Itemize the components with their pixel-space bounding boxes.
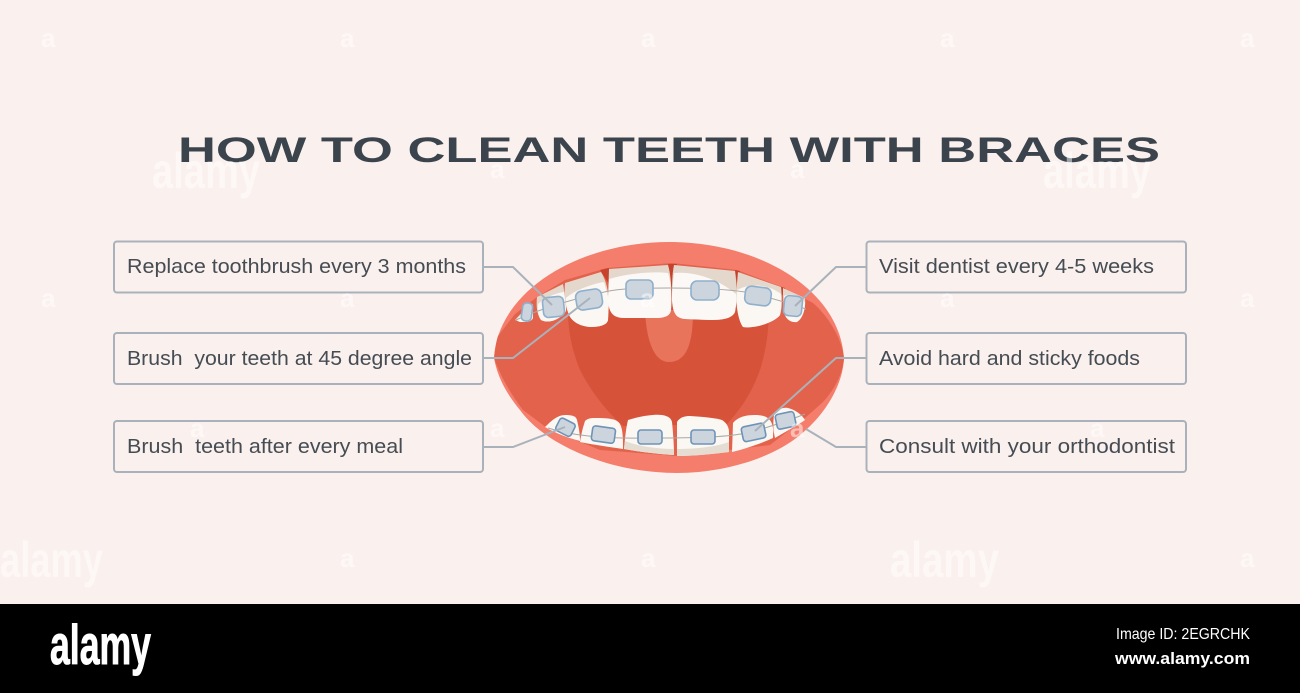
label: visit dentist: Visit dentist every 4-5 weeks xyxy=(879,255,1154,278)
label: visit dentist xyxy=(866,242,1186,292)
stock watermarks: a xyxy=(340,543,355,573)
stock watermarks: a xyxy=(340,23,355,53)
stock watermarks: a xyxy=(640,283,655,313)
stock watermarks: a xyxy=(490,154,505,184)
label: consult orthodontist xyxy=(866,421,1186,472)
stock watermarks xyxy=(0,23,1255,588)
stock watermarks: alamy xyxy=(1043,143,1151,199)
upper braces xyxy=(516,280,806,322)
upper tooth white faces xyxy=(516,307,533,322)
stock watermarks: alamy xyxy=(890,532,999,588)
stock watermarks: a xyxy=(190,413,205,443)
image id: Image ID: 2EGRCHK xyxy=(1116,626,1250,643)
label: brush at 45 degrees xyxy=(114,333,483,384)
upper teeth xyxy=(515,265,805,327)
stock watermarks: a xyxy=(641,543,656,573)
footer logo: alamy xyxy=(50,613,151,676)
lower teeth xyxy=(545,408,805,456)
stock watermarks: a xyxy=(790,413,805,443)
stock watermarks: a xyxy=(41,23,56,53)
label: avoid hard foods xyxy=(866,333,1186,384)
stock watermarks: a xyxy=(790,154,805,184)
stock watermarks: alamy xyxy=(0,532,103,588)
stock watermarks: a xyxy=(1240,543,1255,573)
gum gaps between upper teeth xyxy=(600,264,785,300)
label: avoid hard foods: Avoid hard and sticky foods xyxy=(879,347,1140,370)
label: brush after meals xyxy=(114,421,483,472)
inner throat xyxy=(568,300,769,426)
stock watermarks: a xyxy=(340,283,355,313)
stock watermarks: a xyxy=(1240,283,1255,313)
footer bar xyxy=(0,604,1300,693)
label: replace toothbrush xyxy=(114,242,483,292)
stock watermarks: a xyxy=(490,413,505,443)
label: replace toothbrush: Replace toothbrush every 3 months xyxy=(127,255,466,278)
uvula xyxy=(645,310,693,362)
lower braces xyxy=(548,411,805,444)
label: consult orthodontist: Consult with your orthodontist xyxy=(879,435,1175,458)
label: brush at 45 degrees: Brush your teeth at 45 degree angle xyxy=(127,347,472,370)
stock watermarks: a xyxy=(41,283,56,313)
lips xyxy=(494,242,844,473)
website: www.alamy.com xyxy=(1114,649,1250,668)
mouth cavity xyxy=(494,263,844,456)
mouth illustration xyxy=(494,242,844,473)
title: HOW TO CLEAN TEETH WITH BRACES xyxy=(178,131,1160,170)
label: brush after meals: Brush teeth after every meal xyxy=(127,435,403,458)
stock watermarks: a xyxy=(1240,23,1255,53)
upper tooth beige bases xyxy=(515,304,533,322)
stock watermarks: alamy xyxy=(152,143,260,199)
stock watermarks: a xyxy=(641,23,656,53)
stock watermarks: a xyxy=(940,23,955,53)
stock watermarks: a xyxy=(940,283,955,313)
stock watermarks: a xyxy=(1090,413,1105,443)
leader lines xyxy=(483,267,866,447)
